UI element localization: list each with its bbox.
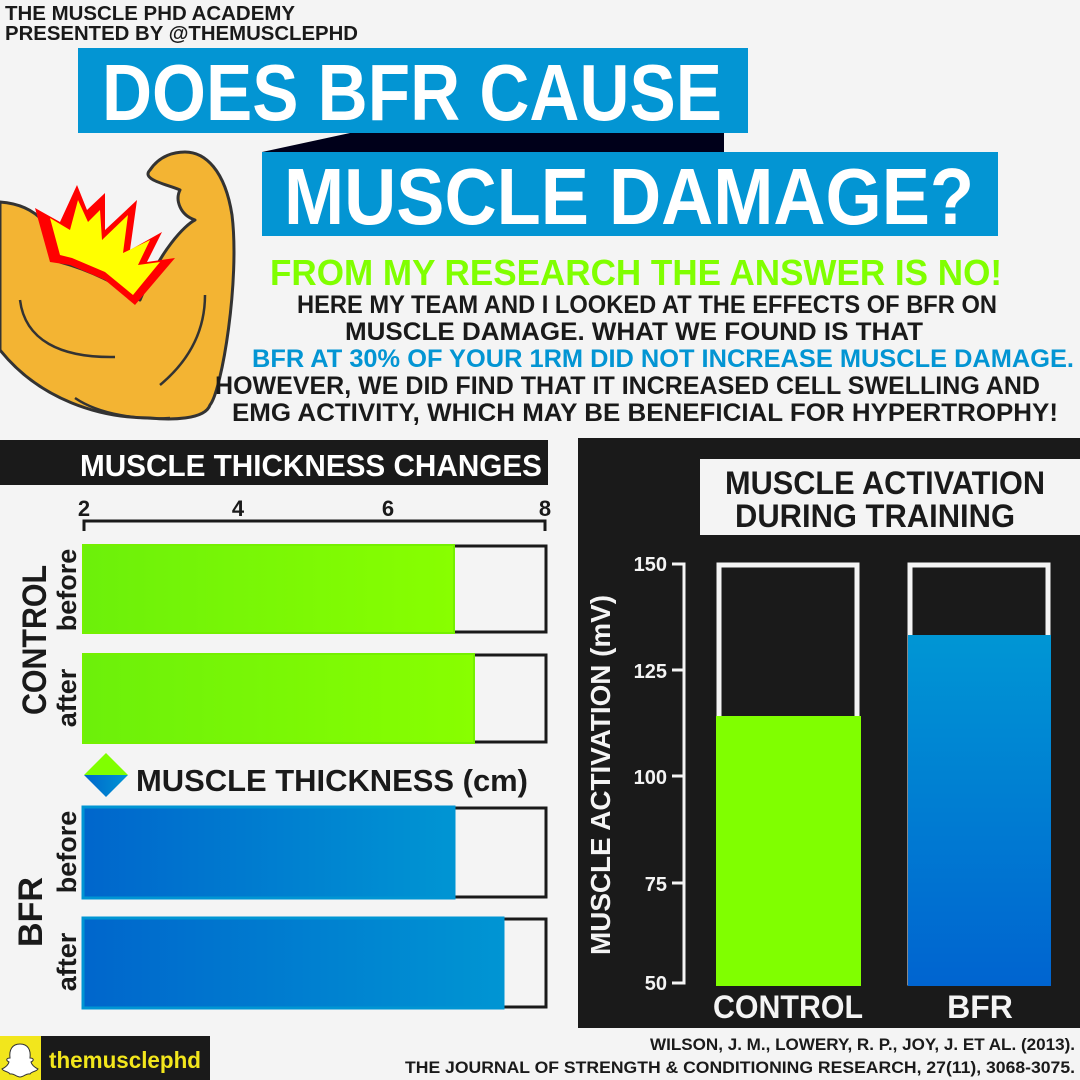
bars <box>84 546 546 1007</box>
title <box>78 48 998 241</box>
y axis: 125 <box>634 661 667 683</box>
panel: muscle activation: MUSCLE ACTIVATION <box>725 465 1045 501</box>
citation <box>405 1035 1075 1077</box>
panel: muscle activation: CONTROL <box>713 989 863 1025</box>
title: DOES BFR CAUSE <box>102 48 722 137</box>
citation: WILSON, J. M., LOWERY, R. P., JOY, J. ET AL. (2013). <box>650 1035 1075 1054</box>
snapchat badge: themusclephd <box>49 1047 201 1073</box>
snapchat badge <box>0 1036 210 1080</box>
group labels <box>12 549 82 991</box>
bars <box>719 565 857 983</box>
panel: muscle activation <box>578 438 1080 1028</box>
body text: EMG ACTIVITY, WHICH MAY BE BENEFICIAL FOR HYPERTROPHY! <box>232 399 1058 427</box>
panel: muscle activation: DURING TRAINING <box>735 498 1015 534</box>
legend: MUSCLE THICKNESS (cm) <box>136 763 528 798</box>
legend <box>84 753 528 798</box>
group labels: BFR <box>12 877 50 947</box>
y axis: 100 <box>634 767 667 789</box>
header credit: THE MUSCLE PHD ACADEMY <box>5 3 296 25</box>
icon: burst <box>35 185 175 305</box>
y axis: 150 <box>634 554 667 576</box>
body text: MUSCLE DAMAGE. WHAT WE FOUND IS THAT <box>345 318 923 346</box>
body text: HERE MY TEAM AND I LOOKED AT THE EFFECTS OF BFR ON <box>297 291 997 319</box>
group labels: after <box>52 668 82 727</box>
title: MUSCLE DAMAGE? <box>284 152 974 241</box>
y axis <box>634 554 684 995</box>
axis: 2 <box>78 496 90 521</box>
header credit <box>5 3 358 45</box>
body text: HOWEVER, WE DID FIND THAT IT INCREASED CELL SWELLING AND <box>215 372 1040 400</box>
panel: muscle thickness <box>0 440 551 1008</box>
body text <box>215 291 1074 427</box>
answer headline: FROM MY RESEARCH THE ANSWER IS NO! <box>270 252 1002 293</box>
panel: muscle thickness: MUSCLE THICKNESS CHANGES <box>80 448 542 483</box>
icon: flexed arm <box>0 152 234 419</box>
y axis: 75 <box>645 874 667 896</box>
group labels: before <box>52 811 82 893</box>
axis: 6 <box>382 496 394 521</box>
body text: BFR AT 30% OF YOUR 1RM DID NOT INCREASE MUSCLE DAMAGE. <box>252 345 1074 373</box>
panel: muscle activation: BFR <box>947 989 1013 1025</box>
group labels: before <box>52 549 82 631</box>
group labels: CONTROL <box>16 565 54 715</box>
axis: 4 <box>232 496 245 521</box>
axis: 8 <box>539 496 551 521</box>
axis <box>78 496 551 531</box>
group labels: after <box>52 932 82 991</box>
citation: THE JOURNAL OF STRENGTH & CONDITIONING RESEARCH, 27(11), 3068-3075. <box>405 1058 1075 1077</box>
panel: muscle activation: MUSCLE ACTIVATION (mV) <box>585 595 616 955</box>
y axis: 50 <box>645 973 667 995</box>
header credit: PRESENTED BY @THEMUSCLEPHD <box>5 23 358 45</box>
